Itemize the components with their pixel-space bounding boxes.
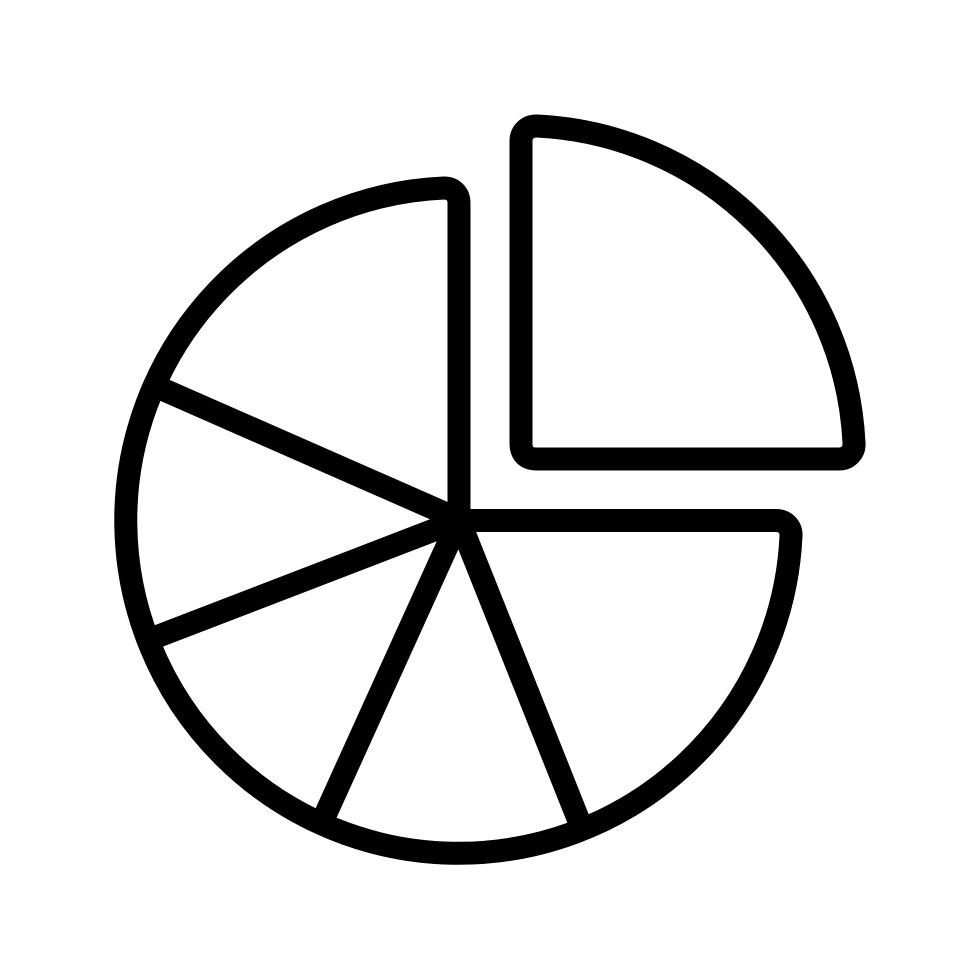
main pie outline [126,188,791,853]
slice divider: bottom right [459,520,581,826]
slice divider: lower left [150,520,459,639]
slice divider: bottom left [322,520,459,822]
detached quarter slice [521,126,854,459]
slice divider: upper left [155,386,459,520]
